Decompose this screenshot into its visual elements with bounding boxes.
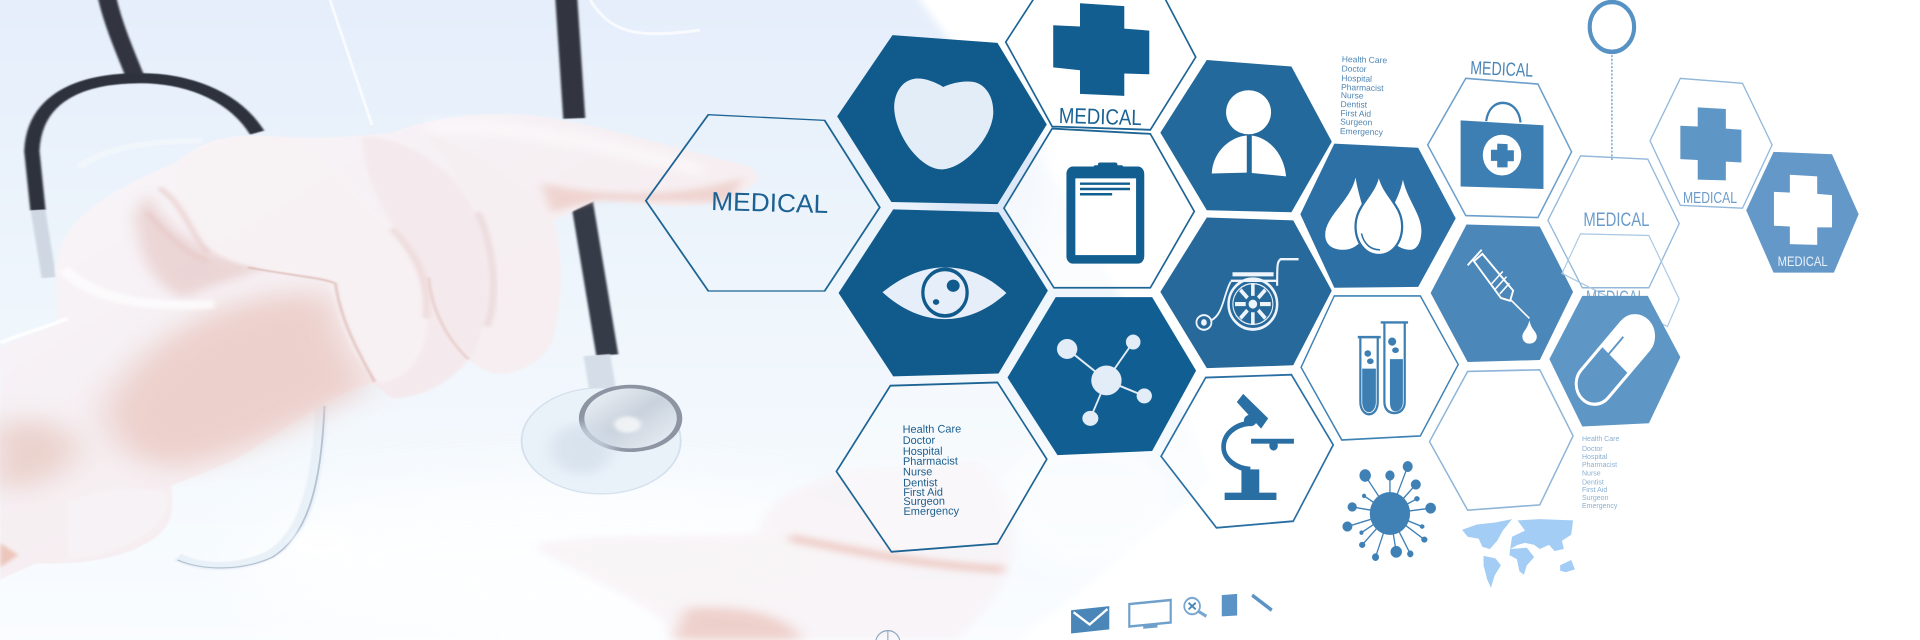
cuff [67, 489, 169, 560]
hexagon: health care list outline [836, 382, 1047, 552]
text: lower right health care list: Health Care [1582, 436, 1619, 443]
hexagon: eye [839, 209, 1048, 376]
hexagon: MEDICAL outline by fingertip [646, 115, 880, 291]
hexagon: empty outline [1430, 370, 1573, 510]
photo: pointing gloved hand [0, 114, 759, 580]
hexagon: plus outline [1650, 78, 1772, 208]
text: health care list in hexagon: Doctor [903, 435, 935, 447]
text: lower right health care list: Emergency [1582, 503, 1618, 510]
text: lower right health care list: Hospital [1582, 454, 1608, 461]
icon: syringe [1468, 250, 1537, 344]
bottom toolbar icons [876, 594, 1272, 640]
text: health care list in hexagon: Health Care [903, 423, 961, 436]
label: MEDICAL in plus hexagon: MEDICAL [1683, 190, 1737, 207]
label: MEDICAL clipped behind pill: MEDICAL [1586, 288, 1645, 309]
icon: magnifier [1184, 598, 1206, 616]
icon: world map [1462, 519, 1575, 588]
icon: eye [882, 267, 1006, 319]
hexagon honeycomb, first column group [836, 0, 1458, 640]
icon: monitor [1129, 600, 1171, 627]
icon: wrench [1252, 595, 1272, 610]
text: top health care list: Doctor [1341, 63, 1367, 74]
icon: wheelchair [1196, 259, 1299, 330]
text: lower right health care list: Surgeon [1582, 495, 1609, 502]
icon: plus [1680, 107, 1741, 180]
icon: microscope [1224, 394, 1294, 500]
label: MEDICAL in upper outline: MEDICAL [1583, 210, 1649, 231]
icon: person [1212, 90, 1286, 176]
text: health care list in hexagon: Nurse [903, 466, 932, 478]
icon: document [1222, 594, 1237, 616]
icon: molecule [1057, 335, 1152, 426]
label: MEDICAL above bag: MEDICAL [1470, 58, 1534, 82]
text: health care list in hexagon: Surgeon [903, 496, 945, 508]
hexagon: MEDICAL outline upper [1548, 156, 1679, 288]
icon: clipboard [1066, 162, 1144, 264]
photo: lower gloved hand [539, 461, 1014, 640]
hexagon: medical bag outline [1428, 78, 1572, 218]
hexagon: syringe [1431, 224, 1573, 362]
text: top health care list: Pharmacist [1341, 82, 1384, 93]
knuckle finger three [422, 131, 558, 373]
icon: white cross [1774, 175, 1832, 245]
photo: doctor coat background [0, 0, 1210, 640]
text: top health care list: Dentist [1341, 99, 1368, 110]
icon: virus [1343, 461, 1436, 561]
text: lower right health care list: Dentist [1582, 480, 1604, 486]
text: lower right health care list: Nurse [1582, 470, 1601, 478]
label: MEDICAL in filled hexagon: MEDICAL [1778, 253, 1828, 269]
text: health care list in hexagon: Pharmacist [903, 455, 958, 468]
text: top health care list: First Aid [1340, 108, 1371, 119]
hexagon: molecule [1007, 297, 1196, 455]
text: lower right health care list: First Aid [1582, 487, 1607, 494]
hexagon: clipboard outline [1004, 129, 1194, 288]
knuckle finger one [177, 136, 426, 384]
hexagon: wheelchair [1160, 218, 1332, 368]
hexagon: test tubes outline [1301, 296, 1458, 440]
line: dotted connector with circle [1590, 2, 1634, 161]
knuckle finger two [361, 137, 489, 398]
icon: test tubes [1358, 322, 1408, 414]
label: MEDICAL: MEDICAL [711, 186, 829, 219]
text: health care list in hexagon: First Aid [903, 487, 943, 499]
text: health care list in hexagon: Emergency [903, 505, 960, 518]
text: top health care list: Surgeon [1340, 116, 1373, 127]
palm pink shading [104, 293, 370, 466]
icon: envelope [1071, 606, 1109, 633]
label: MEDICAL under cross: MEDICAL [1058, 103, 1142, 130]
icon: capsule [1569, 307, 1661, 413]
hexagon: pill [1549, 296, 1680, 427]
icon: medical bag [1461, 103, 1543, 189]
hexagon: doctor person [1160, 60, 1332, 212]
hexagon: drops [1300, 144, 1456, 288]
hexagon: filled cross [1746, 152, 1859, 273]
text: health care list in hexagon: Hospital [903, 446, 943, 458]
icon: large cross [1053, 3, 1149, 96]
photo: stethoscope [32, 0, 681, 568]
glove base shape [0, 114, 759, 580]
right cluster top layer [1343, 78, 1859, 588]
index finger shading [542, 178, 744, 212]
hexagon: microscope outline [1161, 375, 1333, 528]
text: lower right health care list: Doctor [1582, 446, 1603, 453]
hexagon: faint offset outline [1562, 234, 1679, 327]
icon: heart [894, 79, 993, 169]
hexagon: cross outline [1006, 0, 1196, 130]
text: health care list in hexagon [903, 423, 962, 518]
icon: three drops [1325, 173, 1421, 255]
text: health care list in hexagon: Dentist [903, 477, 937, 489]
text: lower right health care list [1582, 436, 1619, 510]
text: lower right health care list: Pharmacist [1582, 462, 1617, 469]
text: top health care list [1340, 54, 1388, 137]
wrinkles and creases [248, 267, 375, 382]
icon: partial circle [876, 631, 900, 640]
text: top health care list: Emergency [1340, 126, 1384, 137]
text: top health care list: Health Care [1342, 54, 1388, 65]
hexagon: heart [837, 35, 1047, 204]
right cluster upper layer [1325, 2, 1679, 510]
text: top health care list: Hospital [1341, 73, 1372, 84]
text: top health care list: Nurse [1341, 90, 1364, 101]
